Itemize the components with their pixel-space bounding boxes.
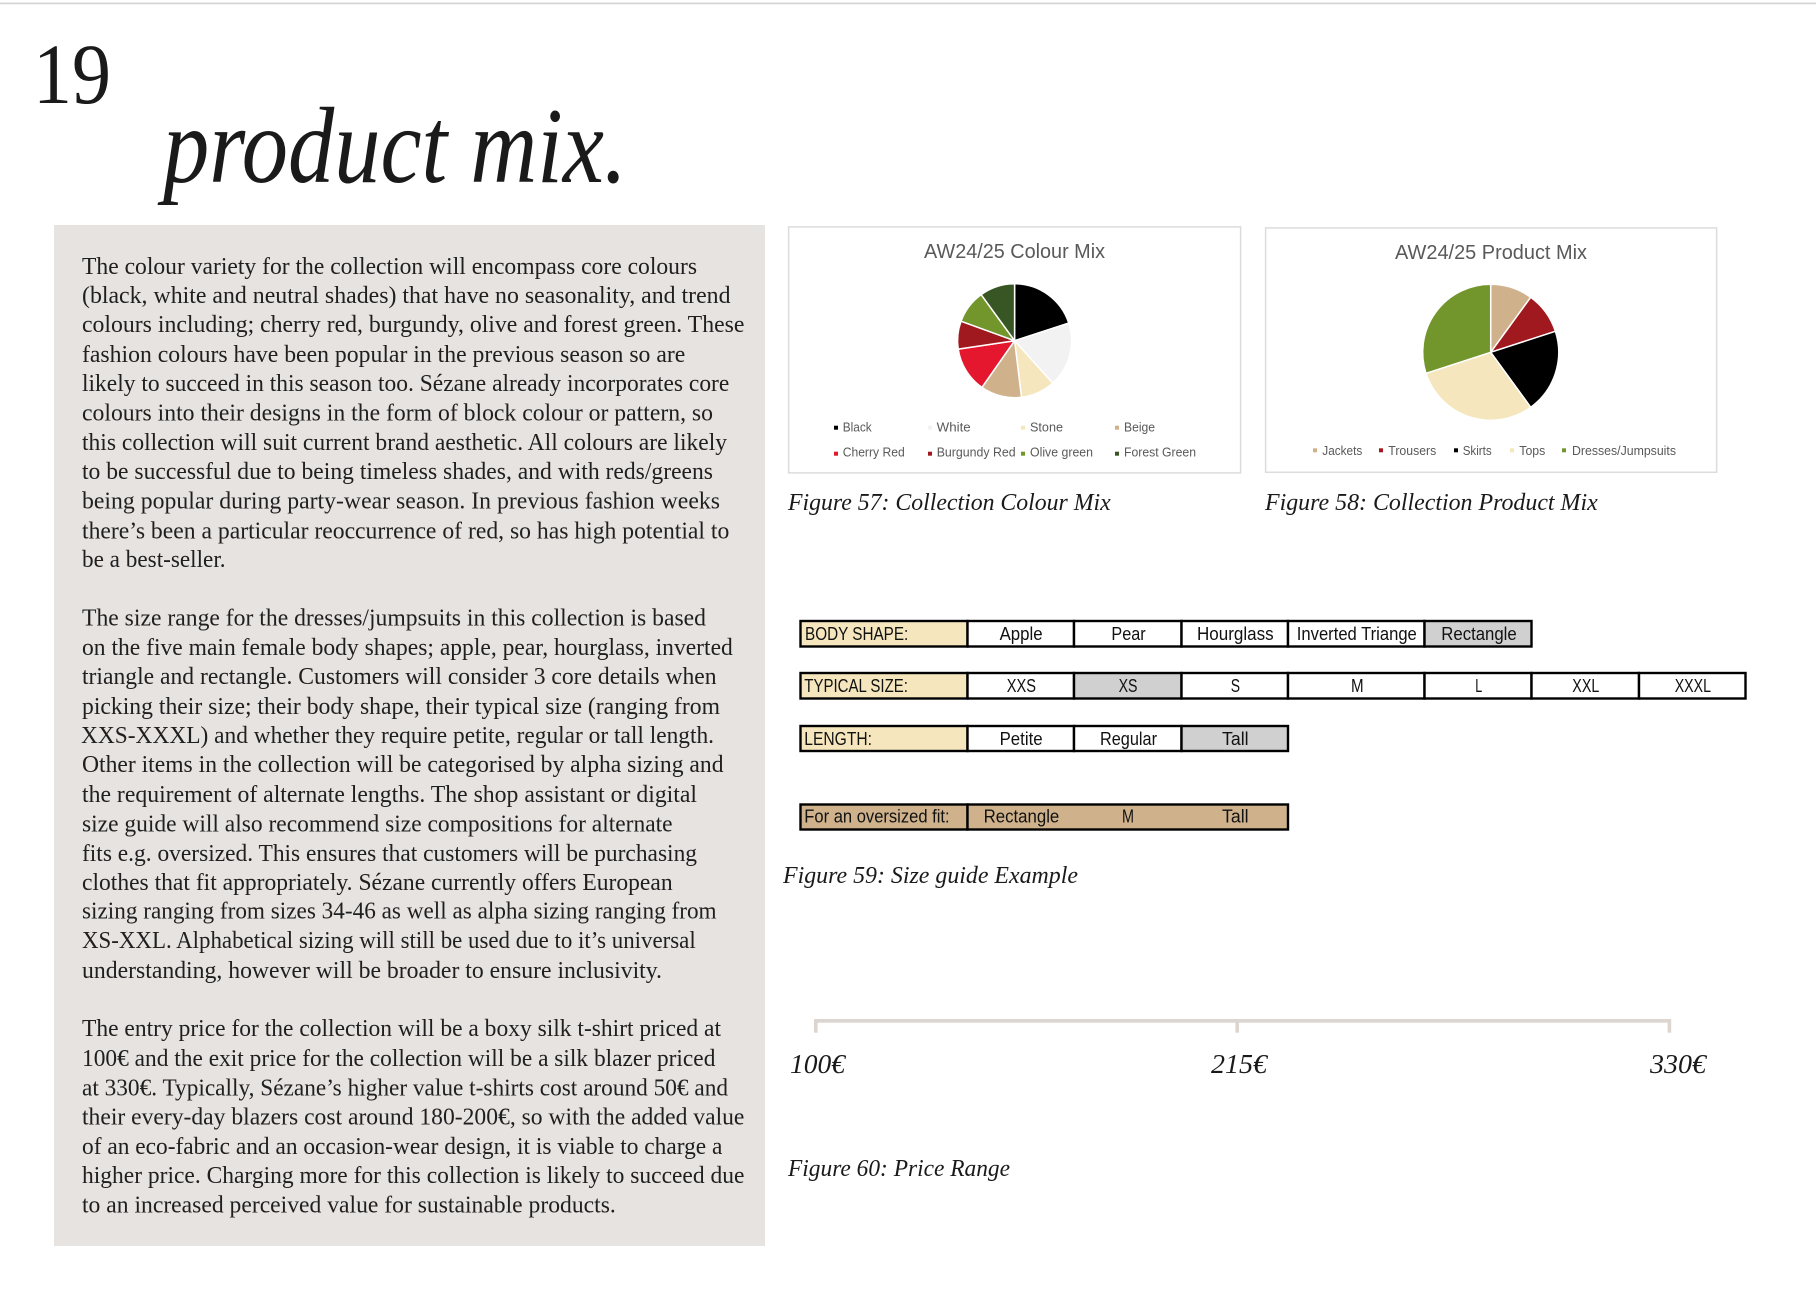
row: typical size: XXL (1572, 676, 1599, 696)
paragraph: size range: XS-XXL. Alphabetical sizing will still be used due to it’s universal (82, 928, 696, 954)
row: body shape: Pear (1111, 624, 1146, 644)
row: length: Petite (1000, 729, 1043, 749)
size guide table (800, 621, 1746, 830)
row: oversized fit: For an oversized fit: (804, 807, 950, 827)
pie: colour mix (958, 284, 1072, 398)
legend: colour mix: Beige (1124, 420, 1155, 435)
legend: product mix: Dresses/Jumpsuits (1572, 443, 1676, 458)
legend: product mix: Tops (1519, 443, 1546, 458)
row: body shape: Apple (1000, 624, 1043, 644)
paragraph: colour variety: (black, white and neutral shades) that have no seasonality, and trend (82, 283, 730, 309)
row: body shape (800, 621, 1532, 646)
paragraph: colour variety: The colour variety for the collection will encompass core colours (82, 254, 697, 280)
legend: product mix: Jackets (1322, 443, 1363, 458)
price label: mid: 215€ (1211, 1049, 1269, 1079)
paragraph: entry and exit price: their every-day blazers cost around 180-200€, so with the added value (82, 1105, 744, 1131)
row: body shape: Inverted Triange (1297, 624, 1417, 644)
paragraph: entry and exit price (82, 1016, 744, 1218)
price label: exit: 330€ (1649, 1049, 1708, 1079)
chart: product mix (1266, 228, 1717, 472)
paragraph: entry and exit price: higher price. Charging more for this collection is likely to succeed due (82, 1163, 744, 1189)
paragraph: colour variety: fashion colours have been popular in the previous season so are (82, 342, 685, 368)
paragraph: size range: XXS-XXXL) and whether they require petite, regular or tall length. (81, 723, 714, 749)
row: oversized fit (800, 804, 1288, 830)
paragraph: entry and exit price: of an eco-fabric and an occasion-wear design, it is viable to charge a (82, 1134, 723, 1160)
paragraph: size range: picking their size; their body shape, their typical size (ranging from (82, 694, 720, 720)
title: product mix. (157, 87, 627, 206)
paragraph: size range: clothes that fit appropriately. Sézane currently offers European (82, 870, 673, 896)
row: typical size: TYPICAL SIZE: (804, 676, 908, 696)
panel: text column (54, 225, 765, 1246)
caption: figure 57: Figure 57: Collection Colour Mix (787, 490, 1111, 516)
row: typical size (800, 673, 1746, 698)
legend: product mix: Trousers (1388, 443, 1437, 458)
paragraph: colour variety: this collection will suit current brand aesthetic. All colours are likely (82, 430, 727, 456)
legend: colour mix: Stone (1030, 420, 1063, 435)
paragraph: size range: size guide will also recommend size compositions for alternate (82, 812, 673, 838)
row: typical size: L (1475, 676, 1482, 696)
paragraph: size range: understanding, however will be broader to ensure inclusivity. (82, 958, 662, 984)
row: oversized fit: Tall (1222, 807, 1249, 827)
row: typical size: XXXL (1675, 676, 1711, 696)
row: body shape: Rectangle (1441, 624, 1517, 644)
legend: product mix (1313, 443, 1676, 458)
caption: figure 59: Figure 59: Size guide Example (782, 863, 1078, 889)
price range scale (790, 1019, 1708, 1079)
paragraph: entry and exit price: to an increased perceived value for sustainable products. (82, 1192, 616, 1218)
row: oversized fit: Rectangle (984, 807, 1059, 827)
paragraph: colour variety (82, 254, 744, 573)
paragraph: size range: triangle and rectangle. Customers will consider 3 core details when (82, 664, 717, 690)
row: oversized fit: M (1122, 807, 1134, 827)
paragraph: entry and exit price: The entry price for the collection will be a boxy silk t-shirt priced at (82, 1016, 721, 1042)
legend: product mix: Skirts (1463, 443, 1492, 458)
row: typical size: XXS (1007, 676, 1036, 696)
legend: colour mix (834, 420, 1196, 460)
paragraph: colour variety: colours including; cherry red, burgundy, olive and forest green. These (82, 312, 744, 338)
paragraph: colour variety: there’s been a particular reoccurrence of red, so has high potential to (82, 518, 729, 544)
row: typical size: M (1351, 676, 1364, 696)
row: length: LENGTH: (804, 729, 872, 749)
page number: 19 (33, 26, 111, 122)
paragraph: size range: Other items in the collection will be categorised by alpha sizing and (82, 752, 724, 778)
row: typical size: S (1231, 676, 1240, 696)
row: typical size: XS (1119, 676, 1138, 696)
paragraph: size range: The size range for the dresses/jumpsuits in this collection is based (82, 606, 706, 632)
paragraph: entry and exit price: at 330€. Typically, Sézane’s higher value t-shirts cost around 50€ and (82, 1075, 728, 1101)
legend: colour mix: Forest Green (1124, 445, 1196, 460)
row: body shape: BODY SHAPE: (805, 624, 908, 644)
paragraph: colour variety: be a best-seller. (82, 547, 226, 573)
paragraph: colour variety: colours into their designs in the form of block colour or pattern, so (82, 400, 713, 426)
legend: colour mix: Cherry Red (843, 445, 905, 460)
paragraph: size range: the requirement of alternate lengths. The shop assistant or digital (82, 782, 697, 808)
legend: colour mix: Olive green (1030, 445, 1093, 460)
paragraph: colour variety: to be successful due to being timeless shades, and with reds/greens (82, 459, 713, 485)
paragraph: size range: fits e.g. oversized. This ensures that customers will be purchasing (82, 841, 697, 867)
chart: colour mix (789, 227, 1241, 473)
chart: product mix: AW24/25 Product Mix (1395, 242, 1587, 264)
paragraph: size range: sizing ranging from sizes 34-46 as well as alpha sizing ranging from (82, 899, 717, 925)
paragraph: colour variety: being popular during party-wear season. In previous fashion weeks (82, 488, 720, 514)
legend: colour mix: White (937, 420, 971, 435)
paragraph: size range: on the five main female body shapes; apple, pear, hourglass, inverted (82, 635, 733, 661)
chart: colour mix: AW24/25 Colour Mix (924, 241, 1105, 263)
row: body shape: Hourglass (1197, 624, 1274, 644)
paragraph: size range (81, 606, 733, 984)
caption: figure 60: Figure 60: Price Range (787, 1156, 1010, 1182)
caption: figure 58: Figure 58: Collection Product Mix (1264, 490, 1598, 516)
row: length (800, 726, 1288, 751)
row: length: Tall (1222, 729, 1249, 749)
paragraph: entry and exit price: 100€ and the exit price for the collection will be a silk blazer priced (82, 1046, 715, 1072)
legend: colour mix: Burgundy Red (937, 445, 1016, 460)
legend: colour mix: Black (843, 420, 872, 435)
row: length: Regular (1100, 729, 1157, 749)
price label: entry: 100€ (790, 1049, 847, 1079)
paragraph: colour variety: likely to succeed in this season too. Sézane already incorporates core (82, 371, 729, 397)
pie: product mix (1423, 284, 1559, 420)
